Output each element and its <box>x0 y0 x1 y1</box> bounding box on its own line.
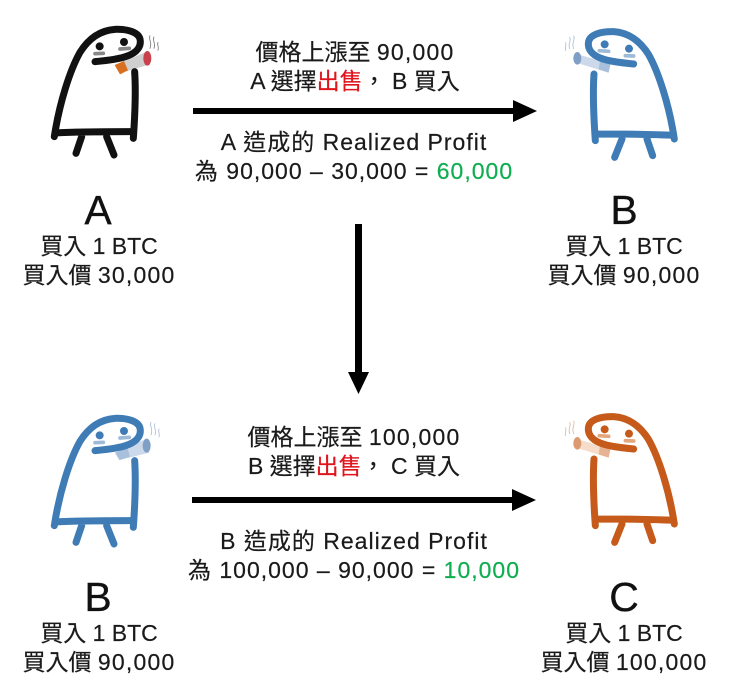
text: B bottom purchase info: 買入價 90,000 <box>23 649 175 675</box>
label: B bottom: B <box>84 574 112 620</box>
text: C purchase info: 買入價 100,000 <box>541 649 707 675</box>
character C: orange mirrored <box>565 417 674 542</box>
text: B purchase info <box>548 233 700 288</box>
text: B realized profit: 為 100,000 – 90,000 = 10,000 <box>188 557 520 583</box>
text: B purchase info: 買入價 90,000 <box>548 262 700 288</box>
text: A purchase info <box>23 233 175 288</box>
text: A realized profit: A 造成的 Realized Profit <box>221 129 487 155</box>
arrow: top row down to bottom row <box>348 224 369 394</box>
text: B bottom purchase info: 買入 1 BTC <box>40 620 158 646</box>
label: A: A <box>84 187 112 233</box>
text: C purchase info: 買入 1 BTC <box>565 620 683 646</box>
text: B bottom purchase info <box>23 620 175 675</box>
label: B top: B <box>610 187 638 233</box>
character B top: blue mirrored <box>565 32 674 157</box>
text: A realized profit: 為 90,000 – 30,000 = 60,000 <box>195 158 513 184</box>
text: bottom transaction: B 選擇出售， C 買入 <box>248 453 460 479</box>
label: C: C <box>609 574 639 620</box>
arrow: A to B <box>193 100 537 122</box>
text: top transaction: A 選擇出售， B 買入 <box>250 68 460 94</box>
text: C purchase info <box>541 620 707 675</box>
text: B purchase info: 買入 1 BTC <box>565 233 683 259</box>
text: top transaction <box>250 39 460 94</box>
arrow: B to C <box>192 489 536 511</box>
text: bottom transaction: 價格上漲至 100,000 <box>248 424 460 450</box>
text: B realized profit: B 造成的 Realized Profit <box>220 528 488 554</box>
text: A purchase info: 買入 1 BTC <box>40 233 158 259</box>
text: top transaction: 價格上漲至 90,000 <box>256 39 454 65</box>
text: A realized profit <box>195 129 513 184</box>
text: bottom transaction <box>248 424 460 479</box>
character A: black with cigarette <box>54 29 158 155</box>
text: A purchase info: 買入價 30,000 <box>23 262 175 288</box>
text: B realized profit <box>188 528 520 583</box>
character B bottom: blue <box>54 418 159 544</box>
